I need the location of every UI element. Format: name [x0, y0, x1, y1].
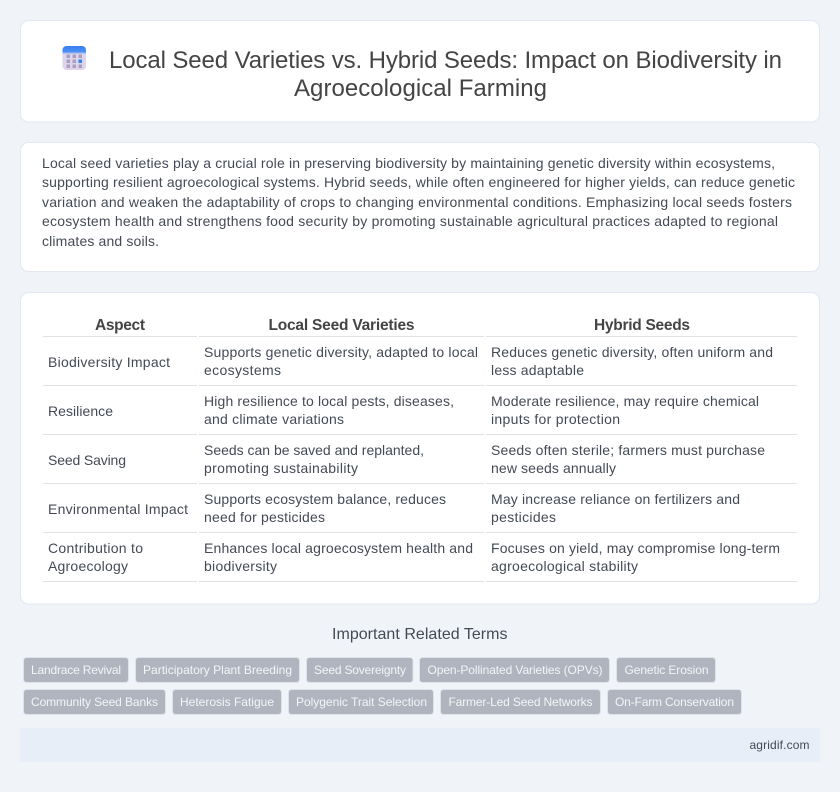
title [109, 47, 782, 102]
row: environmental impact: Supports ecosystem balance, reduces [204, 491, 446, 507]
row: biodiversity impact [48, 344, 773, 378]
tags: related terms: Genetic Erosion [624, 663, 708, 677]
row: contribution to agroecology: Contribution to [48, 540, 143, 556]
tags: related terms: Community Seed Banks [31, 695, 158, 709]
title: Agroecological Farming [294, 75, 547, 102]
tags: related terms: Polygenic Trait Selection [296, 695, 427, 709]
row: biodiversity impact: Supports genetic diversity, adapted to local [204, 344, 478, 360]
row: seed saving: promoting sustainability [204, 460, 358, 476]
row: biodiversity impact: Biodiversity Impact [48, 354, 170, 370]
tags: related terms: Heterosis Fatigue [180, 695, 274, 709]
row: resilience: Moderate resilience, may require chemical [491, 393, 759, 409]
panel: introduction text: climates and soils. [42, 233, 159, 249]
row: environmental impact: May increase reliance on fertilizers and [491, 491, 740, 507]
row: seed saving: Seeds can be saved and replanted, [204, 442, 424, 458]
row: seed saving: new seeds annually [491, 460, 616, 476]
row: biodiversity impact: Reduces genetic diversity, often uniform and [491, 344, 773, 360]
panel: introduction text: Local seed varieties play a crucial role in preserving biodiversity by maintaining genetic diversity within ecosystems, [42, 155, 775, 171]
tags: related terms: Seed Sovereignty [314, 663, 406, 677]
row: contribution to agroecology: Enhances local agroecosystem health and [204, 540, 473, 556]
table header: Local Seed Varieties [268, 317, 414, 334]
title: Local Seed Varieties vs. Hybrid Seeds: Impact on Biodiversity in [109, 47, 782, 74]
table header [95, 317, 690, 334]
row: seed saving: Seeds often sterile; farmers must purchase [491, 442, 765, 458]
row: resilience [48, 393, 759, 427]
row: contribution to agroecology: Agroecology [48, 558, 128, 574]
footer: agridif.com [750, 738, 810, 752]
row: resilience: inputs for protection [491, 411, 620, 427]
row: contribution to agroecology [48, 540, 780, 574]
row: seed saving: Seed Saving [48, 452, 126, 468]
panel: introduction text: supporting resilient agroecological systems. Hybrid seeds, while often engineered for higher yields, can reduce genetic [42, 174, 795, 190]
row: biodiversity impact: less adaptable [491, 362, 584, 378]
row: resilience: High resilience to local pests, diseases, [204, 393, 454, 409]
tags: related terms: Landrace Revival [31, 663, 121, 677]
row: environmental impact: need for pesticides [204, 509, 325, 525]
icon: calendar [62, 46, 86, 70]
panel: comparison table [20, 292, 820, 604]
tags: related terms: Open-Pollinated Varieties (OPVs) [428, 663, 602, 677]
row: contribution to agroecology: Focuses on yield, may compromise long-term [491, 540, 780, 556]
row: resilience: Resilience [48, 403, 113, 419]
panel: introduction text: ecosystem health and strengthens food security by promoting sustainable agricultural practices adapted to regional [42, 213, 778, 229]
row: biodiversity impact: ecosystems [204, 362, 281, 378]
row: contribution to agroecology: agroecological stability [491, 558, 638, 574]
panel: introduction text [20, 142, 820, 272]
panel: introduction text: variation and weaken the adaptability of crops to changing environmental conditions. Emphasizing local seeds fosters [42, 194, 792, 210]
row: contribution to agroecology: biodiversity [204, 558, 277, 574]
row: seed saving [48, 442, 765, 476]
table header: Aspect [95, 317, 145, 334]
row: environmental impact [48, 491, 740, 525]
panel: title header [20, 20, 820, 122]
row: resilience: and climate variations [204, 411, 344, 427]
footer [20, 728, 820, 762]
heading: important related terms: Important Related Terms [332, 626, 508, 643]
tags: related terms: Farmer-Led Seed Networks [448, 695, 592, 709]
tags: related terms [24, 658, 742, 714]
tags: related terms: On-Farm Conservation [615, 695, 734, 709]
row: environmental impact: Environmental Impact [48, 501, 188, 517]
row: environmental impact: pesticides [491, 509, 556, 525]
table header: Hybrid Seeds [594, 317, 690, 334]
tags: related terms: Participatory Plant Breeding [143, 663, 292, 677]
